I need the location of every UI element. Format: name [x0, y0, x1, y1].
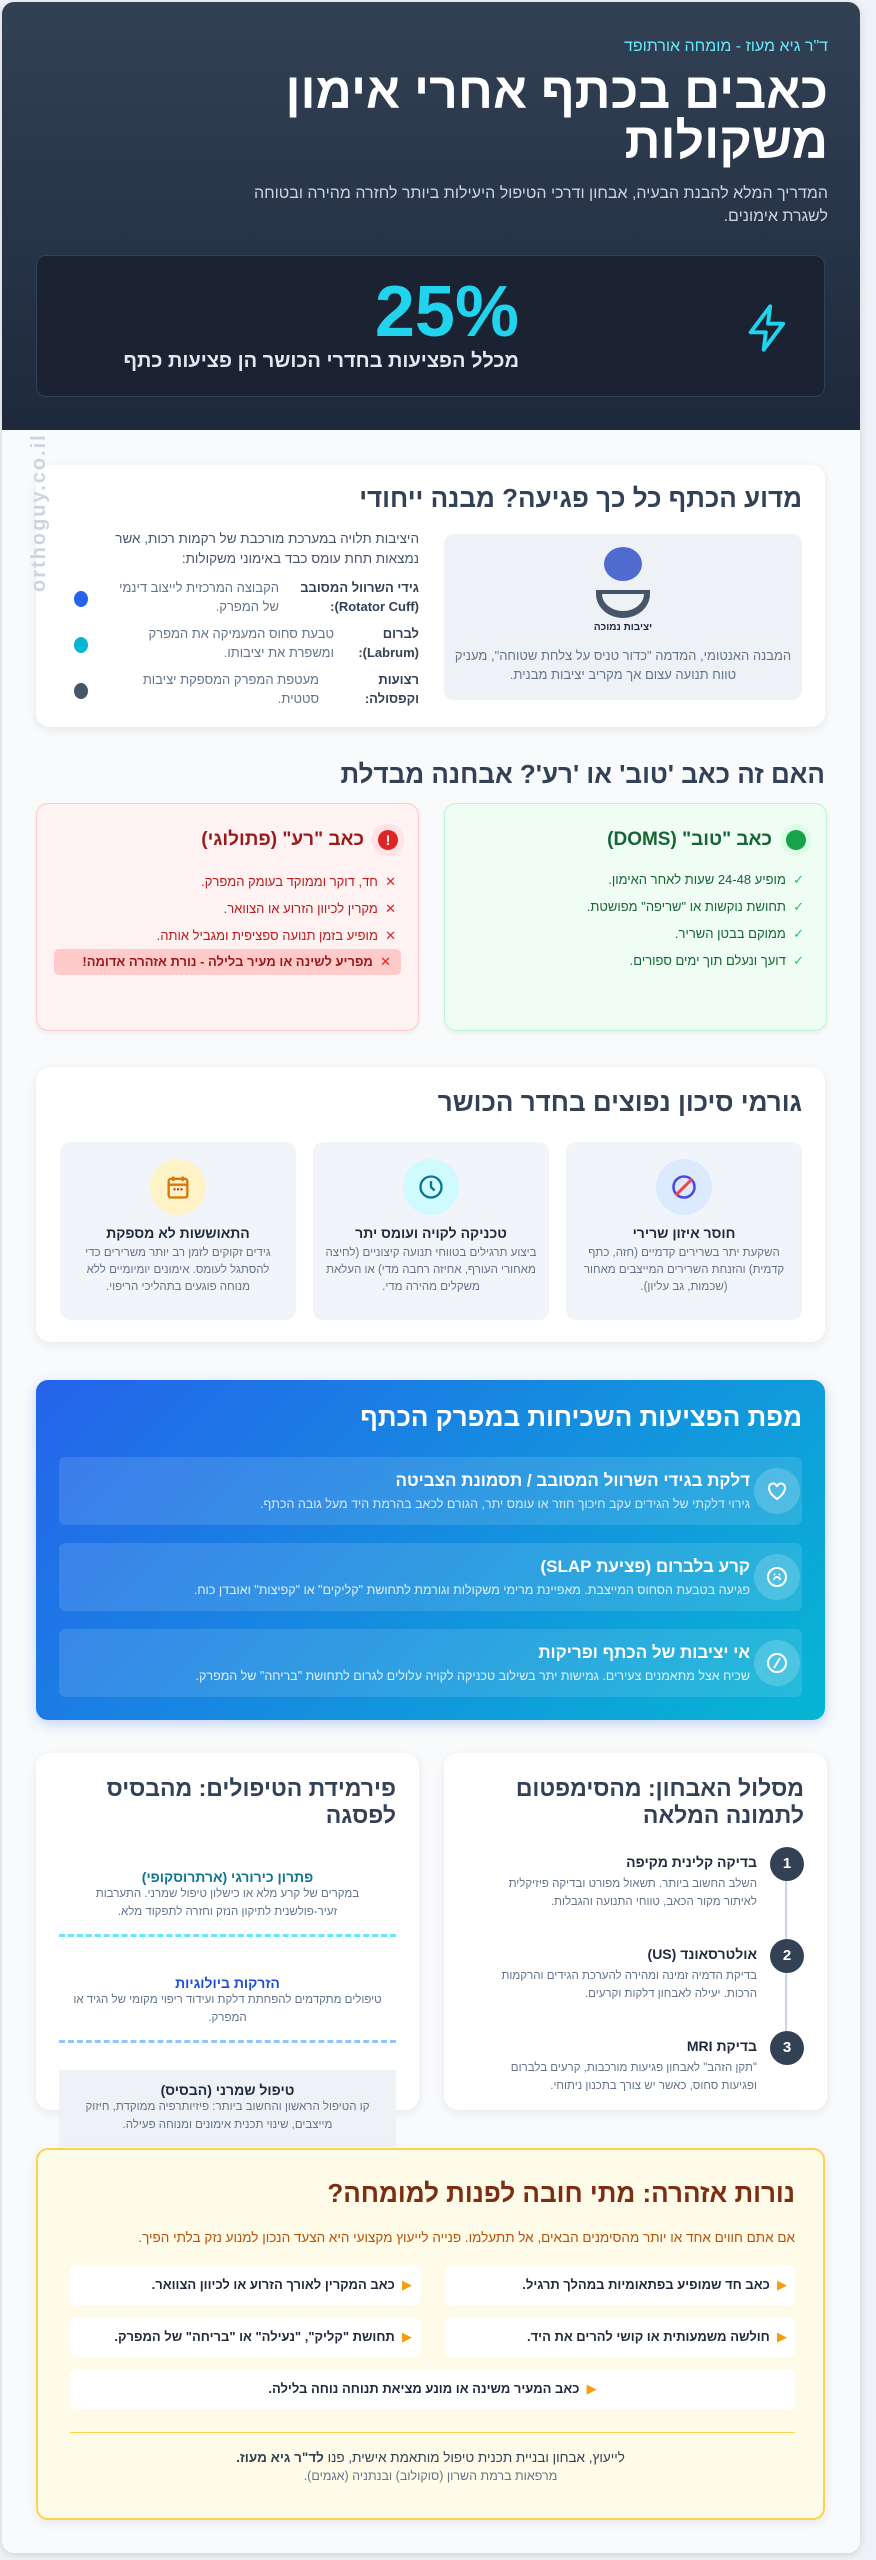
panel: injury map — [36, 1380, 825, 1720]
list: ✕ חד, דוקר וממוקד בעומק המפרק. — [201, 874, 396, 889]
icon: alert — [372, 824, 404, 856]
title — [607, 824, 812, 856]
anatomy box — [444, 534, 802, 700]
warning item 3: ▶ חולשה משמעותית או קושי להרים את היד. — [527, 2329, 787, 2344]
injury: SLAP: פגיעה בטבעת הסחוס המייצבת. מאפיינת מרימי משקולות וגורמת לתחושת "קליקים" או "קפיצות" ואובדן כוח. — [194, 1583, 750, 1597]
step 1: השלב החשוב ביותר. תשאול מפורט ובדיקה פיזיקלית לאיתור מקור הכאב, טווחי התנועה והגבלות. — [509, 1878, 757, 1908]
item: labrum: לברום (Labrum): — [358, 626, 419, 660]
stat number: 25% — [375, 272, 519, 352]
item: ligaments: רצועות וקפסולה: — [365, 672, 419, 706]
item: rotator cuff: הקבוצה המרכזית לייצוב דינמי של המפרק. — [119, 580, 279, 614]
panel: risk factors — [36, 1067, 825, 1342]
list: ✕ מקרין לכיוון הזרוע או הצוואר. — [224, 901, 396, 916]
panel: good pain — [444, 803, 827, 1031]
header — [2, 2, 860, 430]
tier: surgical: במקרים של קרע מלא או כישלון טיפול שמרני. התערבות זעיר-פולשנית לתיקון הנזק וחזרה לתפקוד מלא. — [96, 1888, 359, 1918]
warning item 1 — [445, 2265, 795, 2305]
tier: biologic injections: טיפולים מתקדמים להפחתת דלקת ועידוד ריפוי מקומי של הגיד או המפרק. — [73, 1994, 382, 2024]
stat caption: מכלל הפציעות בחדרי הכושר הן פציעות כתף — [124, 350, 519, 372]
injury: SLAP — [59, 1543, 802, 1611]
warning item 2: ▶ כאב המקרין לאורך הזרוע או לכיוון הצוואר. — [152, 2277, 412, 2292]
warning item 5 — [70, 2369, 795, 2409]
heading: גורמי סיכון נפוצים בחדר הכושר — [438, 1087, 802, 1117]
risk card: technique: ביצוע תרגילים בטווחי תנועה קיצוניים (לחיצה מאחורי העורף, אחיזה רחבה מדי) או העלאת משקלים מהירה מדי. — [326, 1247, 536, 1293]
tier: biologic injections — [59, 1975, 396, 2043]
list — [587, 872, 804, 968]
injury: instability: אי יציבות של הכתף ופריקות — [538, 1643, 750, 1662]
icon: no — [754, 1640, 800, 1686]
tier: biologic injections: הזרקות ביולוגיות — [175, 1975, 280, 1991]
warning item 2 — [70, 2265, 420, 2305]
risk card: muscle imbalance: השקעת יתר בשרירים קדמיים (חזה, כתף קדמית) והזנחת השרירים המייצבים מאחור (שכמות, גב עליון). — [584, 1247, 784, 1293]
list: ✓ ממוקם בבטן השריר. — [675, 926, 804, 941]
item: labrum: טבעת סחוס המעמיקה את המפרק ומשפרת את יציבותו. — [148, 626, 334, 660]
heading: מסלול האבחון: מהסימפטום לתמונה המלאה — [516, 1775, 804, 1828]
heading: good vs bad pain: האם זה כאב 'טוב' או 'רע'? אבחנה מבדלת — [340, 759, 825, 789]
risk card: muscle imbalance — [566, 1142, 802, 1320]
footer contact: מרפאות ברמת השרון (סוקולוב) ובנתניה (אגמים). — [304, 2469, 557, 2483]
red warning row — [54, 949, 401, 975]
heading: פירמידת הטיפולים: מהבסיס לפסגה — [107, 1775, 396, 1828]
step 1 — [508, 1847, 804, 1908]
injury: SLAP: קרע בלברום (פציעת SLAP) — [540, 1557, 750, 1576]
list — [157, 874, 396, 943]
item: ligaments: מעטפת המפרק המספקת יציבות סטטית. — [143, 672, 319, 706]
warning item 1: ▶ כאב חד שמופיע בפתאומיות במהלך תרגיל. — [522, 2277, 787, 2292]
icon: ball and socket — [594, 547, 652, 633]
risk card: technique — [313, 1142, 549, 1320]
step 3 — [511, 2031, 804, 2092]
list: ✓ מופיע 24-48 שעות לאחר האימון. — [608, 872, 804, 887]
risk card: muscle imbalance: חוסר איזון שרירי — [633, 1225, 735, 1241]
step 1: בדיקה קלינית מקיפה — [626, 1854, 757, 1870]
title: כאבים בכתף אחרי אימון משקולות — [285, 63, 828, 169]
injury: rotator cuff — [59, 1457, 802, 1525]
footer contact: לייעוץ, אבחון ובניית תכנית טיפול מותאמת אישית, פנו לד"ר גיא מעוז. — [236, 2450, 625, 2465]
injury: instability — [59, 1629, 802, 1697]
watermark: orthoguy.co.il — [28, 433, 50, 592]
injury: instability: שכיח אצל מתאמנים צעירים. גמישות יתר בשילוב טכניקה לקויה עלולים לגרום לתחושת "בריחה" של המפרק. — [196, 1669, 750, 1683]
tier: surgical: פתרון כירורגי (ארתרוסקופי) — [142, 1869, 313, 1885]
heading: מדוע הכתף כל כך פגיעה? מבנה ייחודי — [359, 483, 802, 513]
warning item 3 — [445, 2317, 795, 2357]
risk card: recovery: גידים זקוקים לזמן רב יותר משרירים כדי להסתגל לעומס. אימונים יומיומיים ללא מנוחה פוגעים בתהליכי הריפוי. — [85, 1247, 271, 1293]
step 2 — [501, 1939, 804, 2000]
warning item 4: ▶ תחושת "קליק", "נעילה" או "בריחה" של המפרק. — [114, 2329, 412, 2344]
icon: clock — [403, 1159, 459, 1215]
tier: conservative base: טיפול שמרני (הבסיס) — [161, 2082, 294, 2098]
icon: imbalance — [656, 1159, 712, 1215]
icon: good — [780, 824, 812, 856]
panel: diagnosis path — [444, 1753, 827, 2110]
intro text: היציבות תלויה במערכת מורכבת של רקמות רכות, אשר נמצאות תחת עומס כבד באימוני משקולות: — [115, 531, 419, 566]
title: כאב "טוב" (DOMS) — [607, 829, 772, 850]
intro: אם אתם חווים אחד או יותר מהסימנים הבאים, אל תתעלמו. פנייה לייעוץ מקצועי היא הצעד הנכון למנוע נזק בלתי הפיך. — [138, 2230, 795, 2245]
risk card: recovery — [60, 1142, 296, 1320]
author line: ד"ר גיא מעוז - מומחה אורתופד — [624, 38, 828, 55]
panel: bad pain — [36, 803, 419, 1031]
list: ✓ דועך ונעלם תוך ימים ספורים. — [630, 953, 804, 968]
warning item 4 — [70, 2317, 420, 2357]
icon: calendar — [150, 1159, 206, 1215]
anatomy caption: המבנה האנטומי, המדמה "כדור טניס על צלחת שטוחה", מעניק טווח תנועה עצום אך מקריב יציבות מבנית. — [455, 648, 791, 682]
panel: treatment pyramid — [36, 1753, 419, 2110]
risk card: technique: טכניקה לקויה ועומס יתר — [355, 1225, 507, 1241]
list: ✕ מופיע בזמן תנועה ספציפית ומגביל אותה. — [157, 928, 396, 943]
step 3: בדיקת MRI — [687, 2038, 757, 2054]
item: labrum — [74, 626, 419, 660]
item: rotator cuff — [74, 580, 419, 614]
item: ligaments — [74, 672, 419, 706]
injury: rotator cuff: גירוי דלקתי של הגידים עקב חיכוך חוזר או עומס יתר, הגורם לכאב בהרמת היד מעל גובה הכתף. — [260, 1497, 750, 1511]
item: rotator cuff: גידי השרוול המסובב (Rotator Cuff): — [300, 580, 419, 614]
step 2: בדיקת הדמיה זמינה ומהירה להערכת הגידים והרקמות הרכות. יעילה לאבחון דלקות וקרעים. — [501, 1970, 757, 2000]
risk card: recovery: התאוששות לא מספקת — [106, 1225, 250, 1241]
warning item 5: ▶ כאב המעיר משינה או מונע מציאת תנוחה נוחה בלילה. — [268, 2381, 597, 2396]
footer contact — [236, 2450, 625, 2483]
timeline line — [785, 1865, 787, 2045]
tier: conservative base — [59, 2070, 396, 2147]
icon: alert: ! — [386, 832, 390, 848]
step 2: 2 — [783, 1947, 791, 1964]
step 3: 3 — [783, 2039, 791, 2056]
step 2: אולטרסאונד (US) — [648, 1946, 757, 1962]
list: ✓ תחושת נוקשות או "שריפה" מפושטת. — [587, 899, 804, 914]
step 1: 1 — [783, 1855, 791, 1872]
tier: surgical — [59, 1869, 396, 1937]
heading: מפת הפציעות השכיחות במפרק הכתף — [360, 1402, 802, 1432]
subtitle: המדריך המלא להבנת הבעיה, אבחון ודרכי הטיפול היעילות ביותר לחזרה מהירה ובטוחה לשגרת אימונים. — [254, 185, 828, 225]
divider — [70, 2432, 795, 2433]
tier: conservative base: קו הטיפול הראשון והחשוב ביותר: פיזיותרפיה ממוקדת, חיזוק מייצבים, שינוי תכנית אימונים ומנוחה פעילה. — [85, 2101, 370, 2131]
icon: ball and socket: יציבות נמוכה — [594, 622, 652, 633]
red warning row: ✕ מפריע לשינה או מעיר בלילה - נורת אזהרה אדומה! — [82, 954, 391, 969]
icon: heart — [754, 1468, 800, 1514]
icon: lightning — [748, 304, 786, 352]
injury: rotator cuff: דלקת בגידי השרוול המסובב / תסמונת הצביטה — [395, 1471, 750, 1490]
heading: נורות אזהרה: מתי חובה לפנות למומחה? — [327, 2178, 795, 2208]
step 3: "תקן הזהב" לאבחון פגיעות מורכבות, קרעים בלברום ופגיעות סחוס, כאשר יש צורך בתכנון ניתוחי. — [511, 2062, 757, 2092]
panel: why shoulder vulnerable — [36, 465, 825, 727]
stat box — [36, 255, 825, 397]
title: כאב "רע" (פתולוגי) — [201, 829, 364, 850]
title — [201, 824, 404, 856]
panel: warning signs — [36, 2148, 825, 2520]
icon: face — [754, 1554, 800, 1600]
